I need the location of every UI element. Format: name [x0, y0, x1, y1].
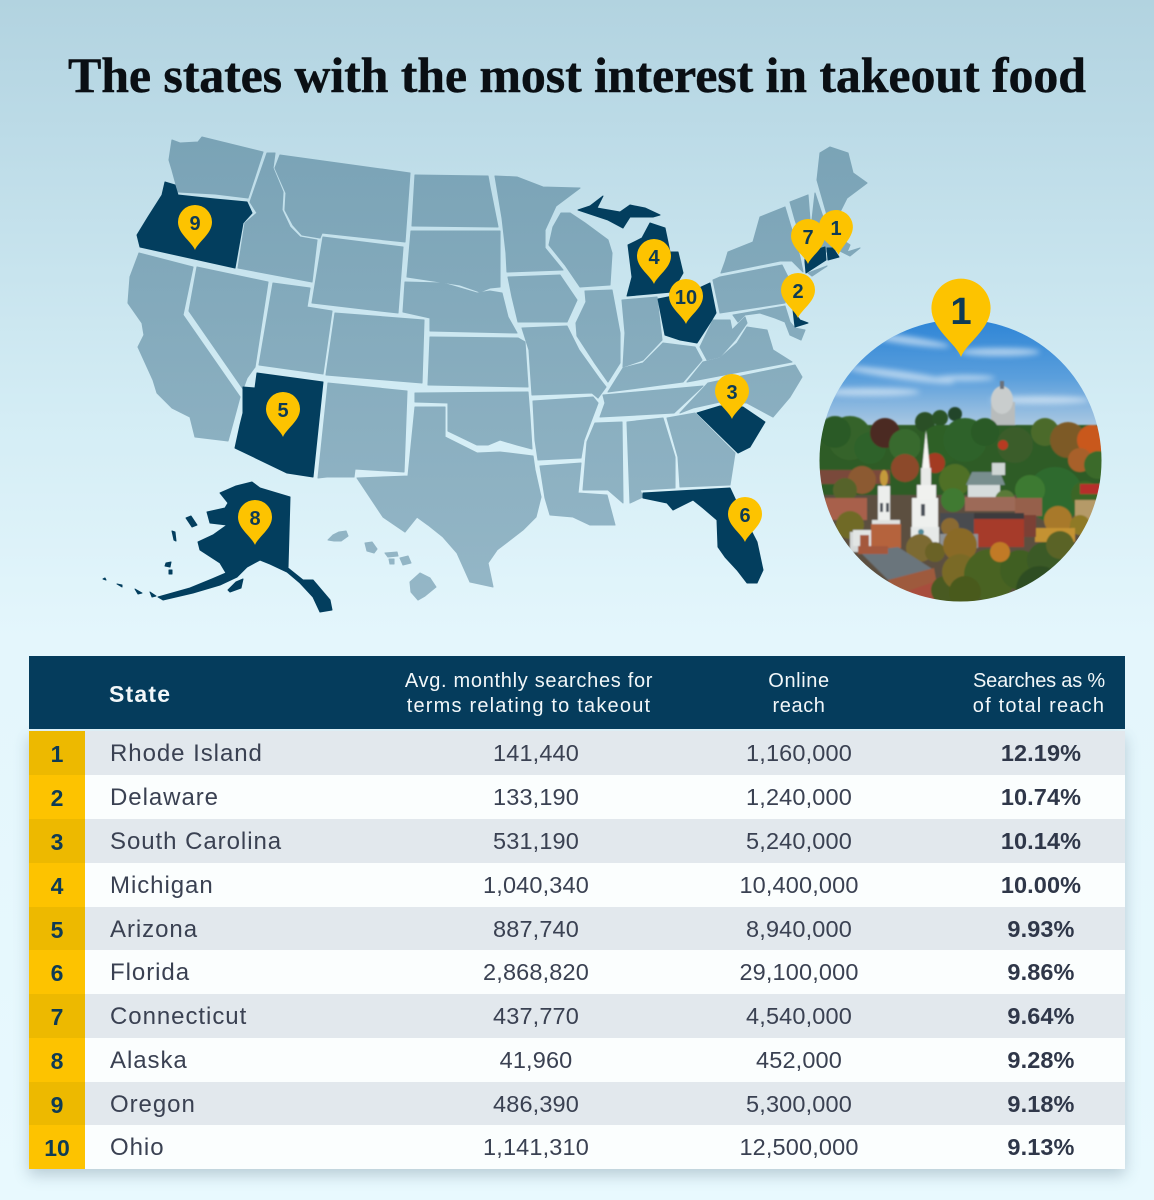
dome — [991, 402, 1015, 426]
roofs and foreground — [906, 534, 934, 562]
highlighted state: Alaska — [103, 482, 332, 612]
header: average monthly searches — [404, 670, 653, 717]
white house — [968, 484, 1000, 498]
row: Rhode Island — [85, 731, 1125, 775]
row: Michigan: 1,040,340 — [483, 872, 589, 898]
steeple tall — [912, 498, 938, 528]
row: Alaska: 452,000 — [756, 1047, 842, 1073]
row: Florida: 29,100,000 — [739, 959, 859, 985]
row: Connecticut: Connecticut — [110, 1003, 247, 1030]
row: Delaware: 10.74% — [1001, 784, 1081, 810]
row: Rhode Island: 141,440 — [493, 740, 579, 766]
row: Rhode Island: Rhode Island — [110, 740, 263, 767]
row: Ohio: 9.13% — [1007, 1134, 1075, 1160]
rank 10 — [29, 1125, 85, 1169]
row: Michigan: Michigan — [110, 872, 214, 899]
highlighted state: Rhode Island — [827, 248, 839, 260]
pin 8: 8 — [249, 508, 261, 530]
non-highlighted states — [128, 137, 867, 600]
row: Connecticut: 9.64% — [1007, 1003, 1075, 1029]
large pin 1: 1 — [950, 290, 972, 333]
row: Ohio — [85, 1125, 1125, 1169]
pin 7: 7 — [802, 227, 814, 249]
header: online reach — [768, 670, 830, 717]
Hawaii — [328, 531, 436, 600]
row: Oregon: 5,300,000 — [746, 1091, 852, 1117]
row: Arizona: 9.93% — [1007, 916, 1075, 942]
pin 7 — [791, 219, 825, 264]
table header — [29, 656, 1125, 729]
pin 2 — [781, 273, 815, 318]
row: Delaware: 133,190 — [493, 784, 579, 810]
header: searches as percent: of total reach — [973, 695, 1105, 717]
row: Arizona — [85, 907, 1125, 951]
highlighted state: Arizona — [235, 373, 323, 477]
mid-town ground — [824, 494, 1081, 600]
highlighted state: Ohio — [658, 283, 716, 343]
highlighted state: Florida — [643, 488, 763, 583]
row: Michigan: 10,400,000 — [739, 872, 859, 898]
rank 1: 1 — [51, 741, 63, 767]
rank 5: 5 — [51, 917, 63, 943]
pin 10: 10 — [675, 287, 697, 309]
row: Michigan — [85, 863, 1125, 907]
row: Arizona: 8,940,000 — [746, 916, 852, 942]
row: Florida: 9.86% — [1007, 959, 1075, 985]
rank 2: 2 — [51, 785, 63, 811]
pin 9: 9 — [189, 213, 201, 235]
row: Delaware: Delaware — [110, 784, 219, 811]
pin 4: 4 — [648, 247, 660, 269]
title: The states with the most interest in takeout food — [68, 47, 1086, 103]
steeple short — [878, 486, 890, 520]
rank 5 — [29, 907, 85, 951]
rank 3: 3 — [51, 829, 63, 855]
large pin 1 — [931, 279, 991, 357]
rank 3 — [29, 819, 85, 863]
row: Connecticut — [85, 994, 1125, 1038]
header: online reach: reach — [772, 695, 826, 717]
row: Connecticut: 4,540,000 — [746, 1003, 852, 1029]
pin 3 — [715, 374, 749, 419]
rank 6 — [29, 950, 85, 994]
left buildings — [825, 498, 867, 520]
highlighted states — [103, 182, 839, 612]
row: Rhode Island: 12.19% — [1001, 740, 1081, 766]
highlighted state: Michigan — [578, 196, 683, 296]
rank 1 — [29, 731, 85, 775]
header: online reach: Online — [768, 670, 830, 692]
row: South Carolina: 5,240,000 — [746, 828, 852, 854]
rank 4: 4 — [51, 873, 63, 899]
row: Alaska: 9.28% — [1007, 1047, 1075, 1073]
row: Delaware: 1,240,000 — [746, 784, 852, 810]
row: Oregon: Oregon — [110, 1091, 196, 1118]
highlighted state: South Carolina — [697, 406, 765, 453]
highlighted state: Connecticut — [805, 247, 826, 273]
pin 10 — [669, 279, 703, 324]
row: Rhode Island: 1,160,000 — [746, 740, 852, 766]
rank 4 — [29, 863, 85, 907]
pin 1 — [817, 208, 856, 257]
pin 8 — [238, 500, 272, 545]
row: Florida: Florida — [110, 959, 190, 986]
pin 1: 1 — [830, 218, 842, 240]
header: average monthly searches: terms relating to takeout — [407, 695, 651, 717]
rank 8 — [29, 1038, 85, 1082]
row: Oregon — [85, 1082, 1125, 1126]
tree line — [820, 424, 1102, 496]
row: South Carolina: 10.14% — [1001, 828, 1081, 854]
pin 3: 3 — [726, 382, 738, 404]
row: Arizona: Arizona — [110, 916, 198, 943]
pin 9 — [178, 205, 212, 250]
row: Oregon: 486,390 — [493, 1091, 579, 1117]
pin 4 — [637, 239, 671, 284]
row: South Carolina — [85, 819, 1125, 863]
row: Florida: 2,868,820 — [483, 959, 589, 985]
rank 2 — [29, 775, 85, 819]
rank 10: 10 — [44, 1135, 70, 1161]
rank 6: 6 — [51, 960, 63, 986]
header: State: State — [109, 681, 171, 707]
row: Oregon: 9.18% — [1007, 1091, 1075, 1117]
row: Alaska — [85, 1038, 1125, 1082]
row: Ohio: Ohio — [110, 1134, 164, 1161]
header: searches as percent — [973, 670, 1105, 717]
row: Michigan: 10.00% — [1001, 872, 1081, 898]
rank 9 — [29, 1082, 85, 1126]
map of the United States with ranked pins — [102, 136, 1102, 612]
pin 5 — [266, 392, 300, 437]
red brick building — [974, 513, 1024, 547]
rank 7 — [29, 994, 85, 1038]
row: Delaware — [85, 775, 1125, 819]
row: Alaska: 41,960 — [500, 1047, 572, 1073]
row: Ohio: 1,141,310 — [483, 1134, 589, 1160]
row: Alaska: Alaska — [110, 1047, 188, 1074]
pin 6: 6 — [739, 505, 751, 527]
highlighted state: Delaware — [793, 310, 808, 327]
header: searches as percent: Searches as % — [973, 670, 1105, 692]
table shadow — [29, 731, 1125, 1169]
header: average monthly searches: Avg. monthly searches for — [405, 670, 653, 692]
rank 9: 9 — [51, 1092, 63, 1118]
rank 8: 8 — [51, 1048, 63, 1074]
row: South Carolina: South Carolina — [110, 828, 282, 855]
row: Florida — [85, 950, 1125, 994]
pin 2: 2 — [792, 281, 804, 303]
row: Arizona: 887,740 — [493, 916, 579, 942]
row: Connecticut: 437,770 — [493, 1003, 579, 1029]
rank 7: 7 — [51, 1004, 63, 1030]
pin 6 — [728, 497, 762, 542]
photo: Rhode Island town view — [820, 322, 1102, 602]
pin 5: 5 — [277, 400, 289, 422]
row: Ohio: 12,500,000 — [739, 1134, 859, 1160]
highlighted state: Oregon — [137, 182, 252, 268]
row: South Carolina: 531,190 — [493, 828, 579, 854]
